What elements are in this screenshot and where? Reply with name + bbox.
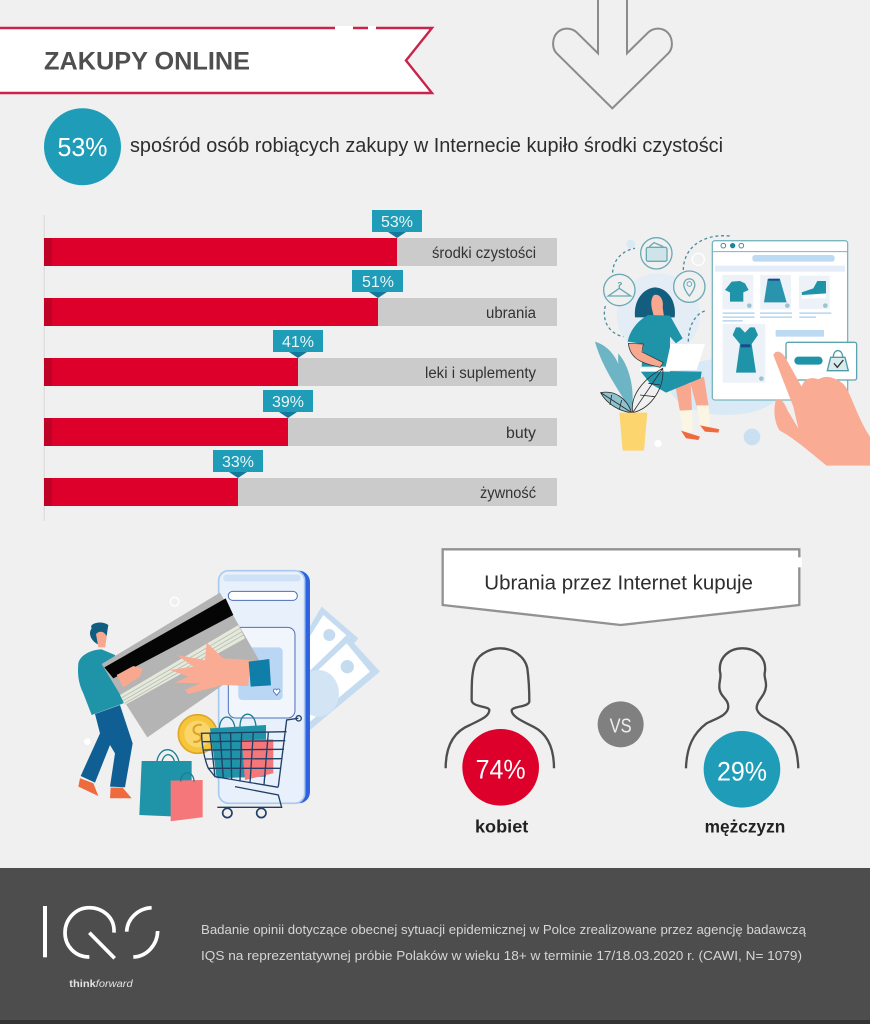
icon: location pin (674, 271, 705, 302)
illustration: man with payment card and phone (78, 571, 380, 821)
callout: clothes heading: Ubrania przez Internet kupuje (484, 573, 753, 595)
badge: VS: VS (610, 715, 632, 737)
title: ZAKUPY ONLINE (44, 48, 250, 76)
man silhouette with 29%: 29% (717, 757, 767, 787)
bar: żywność 33% (44, 450, 557, 506)
woman silhouette with 74% (446, 648, 554, 837)
bar: buty 39%: 39% (272, 394, 304, 411)
card with shopping bag (786, 342, 857, 380)
badge: VS (598, 701, 644, 747)
icon: hanger (604, 274, 635, 306)
man silhouette with 29% (686, 648, 798, 837)
logo tagline: thinkforward (69, 979, 133, 990)
bar: buty 39%: buty (506, 425, 536, 442)
footer panel (0, 868, 870, 1024)
title ribbon (0, 26, 432, 93)
bar: środki czystości 53%: 53% (381, 214, 413, 231)
man silhouette with 29%: mężczyzn (705, 817, 785, 837)
bar: ubrania 51%: 51% (362, 274, 394, 291)
bar: środki czystości 53% (44, 210, 557, 266)
woman silhouette with 74%: 74% (476, 755, 526, 785)
badge: 53%: 53% (58, 132, 108, 162)
bar: buty 39% (44, 390, 557, 446)
smartphone (219, 571, 310, 803)
callout: clothes heading (443, 549, 802, 625)
woman silhouette with 74%: kobiet (475, 817, 528, 837)
methodology note: IQS na reprezentatywnej próbie Polaków w wieku 18+ w terminie 17/18.03.2020 r. (CAWI, N= 1079) (201, 948, 802, 963)
bar: leki i suplementy 41%: 41% (282, 334, 314, 351)
icon: down arrow (553, 0, 672, 108)
logo: IQS (43, 906, 158, 990)
hand (773, 352, 870, 466)
banknotes (287, 607, 380, 730)
browser window (712, 241, 848, 400)
man (78, 623, 133, 798)
gender comparison (443, 549, 802, 837)
woman with laptop (628, 287, 719, 440)
coin (178, 715, 217, 753)
bar: leki i suplementy 41% (44, 330, 557, 386)
icon: wallet (641, 238, 672, 269)
bar: ubrania 51%: ubrania (486, 305, 536, 322)
methodology note: Badanie opinii dotyczące obecnej sytuacji epidemicznej w Polce zrealizowane przez agencję badawczą (201, 922, 807, 937)
shopping bags (139, 750, 203, 821)
reaching hand (170, 643, 271, 694)
bar: leki i suplementy 41%: leki i suplementy (425, 365, 536, 382)
man's hand on card (117, 666, 143, 687)
headline statistic (44, 108, 723, 185)
bar: ubrania 51% (44, 270, 557, 326)
payment card (102, 593, 259, 737)
bar: żywność 33%: żywność (480, 485, 536, 502)
badge: 53% (44, 108, 121, 185)
bar chart (44, 210, 557, 521)
illustration: woman shopping online (595, 236, 870, 466)
bar: środki czystości 53%: środki czystości (432, 245, 536, 262)
shopping cart (201, 714, 301, 818)
bar: żywność 33%: 33% (222, 454, 254, 471)
potted plant (595, 342, 663, 451)
headline text: spośród osób robiących zakupy w Internecie kupiło środki czystości (130, 135, 723, 157)
